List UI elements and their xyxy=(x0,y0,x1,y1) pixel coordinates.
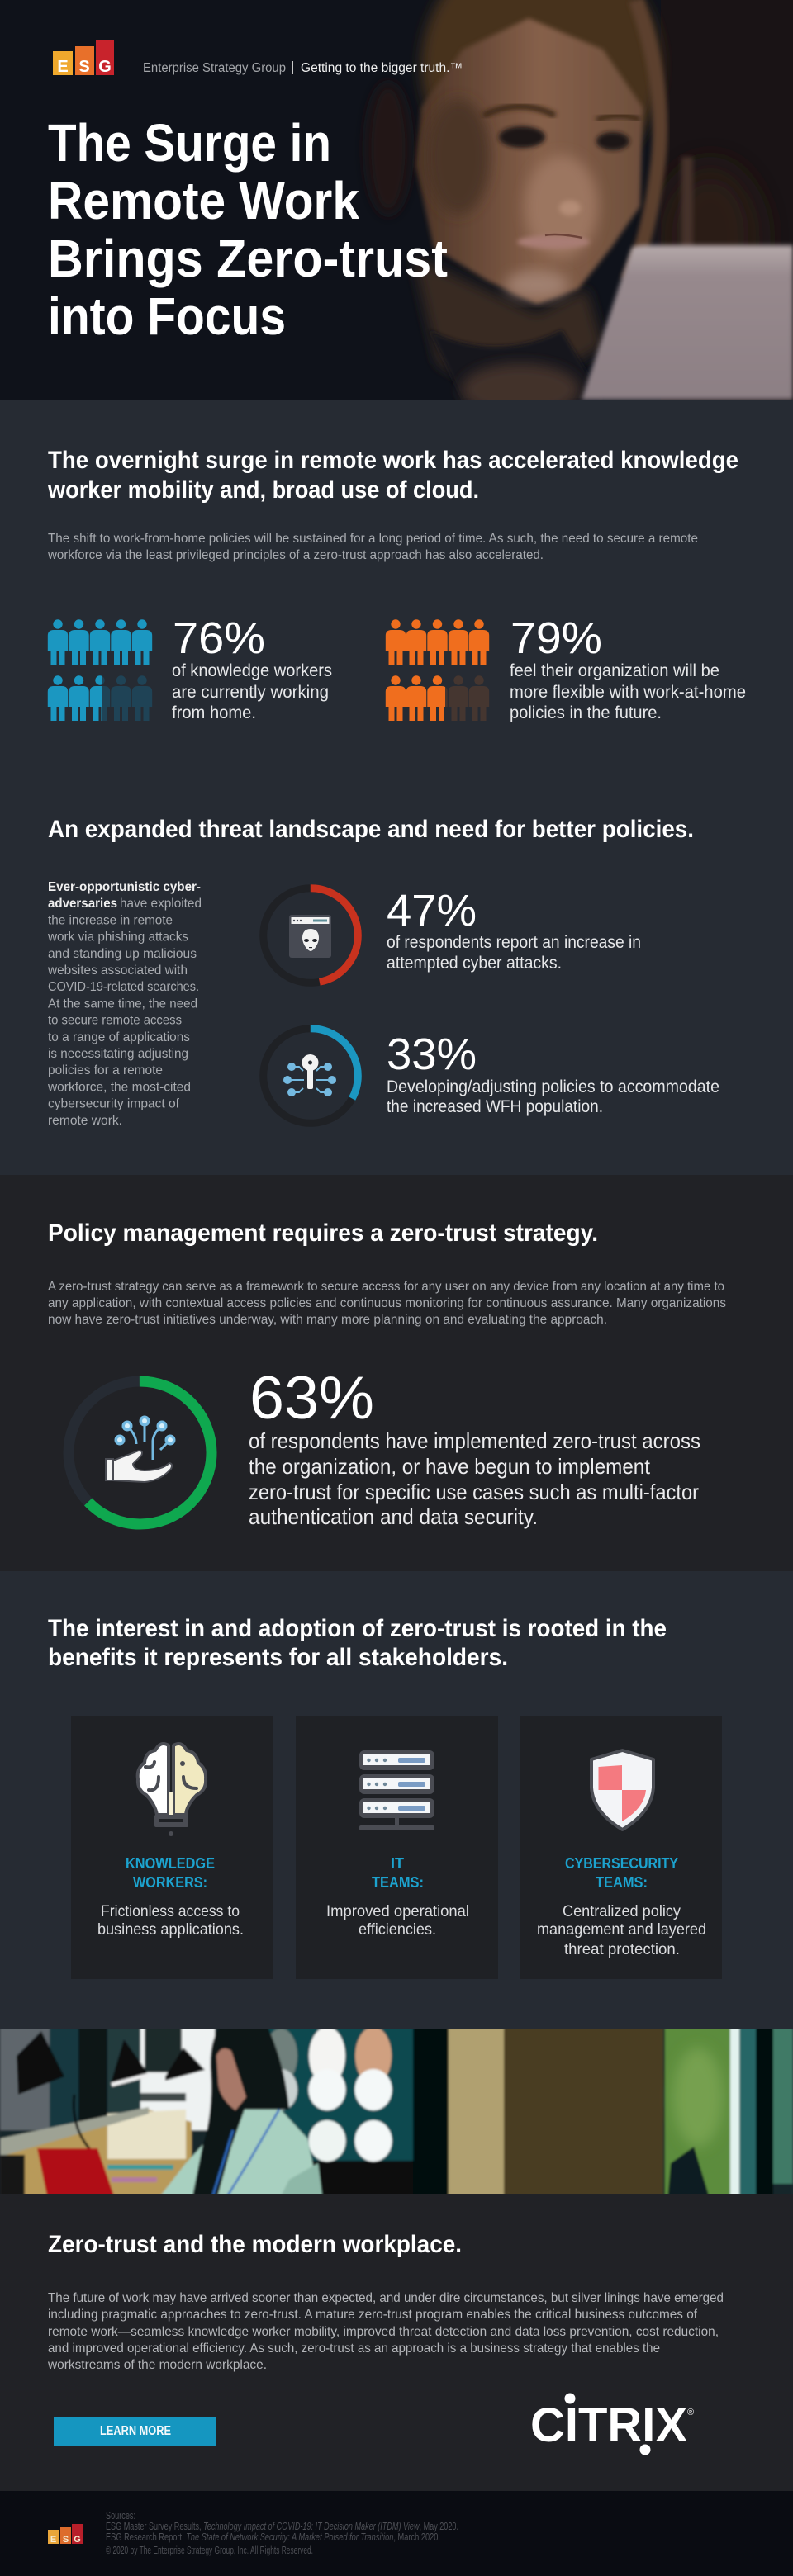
heading: overnight surge: worker mobility and, broad use of cloud. xyxy=(47,476,479,504)
card label: TEAMS: xyxy=(596,1874,648,1891)
panel: cybersecurity teams xyxy=(520,1716,722,1979)
threat text column: work via phishing attacks xyxy=(47,930,188,945)
card text xyxy=(326,1903,469,1939)
threat text column: to secure remote access xyxy=(48,1014,182,1027)
intro text xyxy=(47,532,698,562)
threat text column: At the same time, the need xyxy=(48,997,197,1011)
threat text column: cybersecurity impact of xyxy=(48,1096,180,1111)
threat text column: have exploited xyxy=(120,897,202,911)
card text xyxy=(537,1903,706,1958)
card text: management and layered xyxy=(537,1921,706,1939)
closing text: The future of work may have arrived sooner than expected, and under dire circumstances, but silver linings have emerged xyxy=(48,2291,724,2305)
ESG logo: S xyxy=(78,58,90,76)
stat: 63% xyxy=(249,1365,700,1529)
ring chart: 47% with alien icon xyxy=(264,888,358,983)
tagline: Getting to the bigger truth.™ xyxy=(301,61,463,75)
footer ESG logo: G xyxy=(74,2535,81,2545)
icon: orange people 79% xyxy=(386,619,489,721)
threat text column: COVID-19-related searches. xyxy=(48,980,199,994)
card label xyxy=(565,1855,678,1891)
stat: 79% xyxy=(510,613,746,722)
card label: KNOWLEDGE xyxy=(126,1855,215,1872)
stat: 76% xyxy=(172,613,332,722)
intro text: The shift to work-from-home policies will be sustained for a long period of time. As such, the need to secure a remote xyxy=(48,532,698,546)
stat: 47%: of respondents report an increase in xyxy=(387,933,641,952)
card text: Centralized policy xyxy=(563,1903,681,1920)
card text: Improved operational xyxy=(326,1903,469,1920)
title xyxy=(48,113,448,346)
logo: Citrix: ® xyxy=(687,2408,694,2417)
heading: overnight surge xyxy=(47,447,738,504)
tagline xyxy=(143,61,463,75)
tagline: Enterprise Strategy Group xyxy=(143,61,286,75)
stat: 76%: are currently working xyxy=(172,683,329,702)
card text: Frictionless access to xyxy=(101,1903,240,1920)
stat: 79%: more flexible with work-at-home xyxy=(510,683,746,702)
stat: 63%: 63% xyxy=(249,1365,374,1432)
button: learn more xyxy=(54,2417,216,2446)
heading: benefits: The interest in and adoption of zero-trust is rooted in the xyxy=(48,1615,667,1642)
card label: IT xyxy=(391,1855,404,1872)
footer sources: Sources: xyxy=(106,2510,135,2522)
threat text column: websites associated with xyxy=(47,964,188,978)
icon: blue people 76% xyxy=(48,619,152,721)
card label xyxy=(372,1855,424,1891)
stat: 76%: 76% xyxy=(173,613,265,663)
card label xyxy=(126,1855,215,1891)
ESG logo: E xyxy=(57,58,69,76)
threat text column: workforce, the most-cited xyxy=(47,1080,191,1095)
icon: key with circuit nodes xyxy=(283,1054,336,1096)
stat: 79%: policies in the future. xyxy=(510,703,662,722)
title: The Surge in xyxy=(48,113,331,173)
icon: hand with circuit nodes xyxy=(106,1415,175,1482)
stat: 33%: Developing/adjusting policies to accommodate xyxy=(387,1077,719,1096)
footer ESG logo: S xyxy=(63,2535,69,2545)
icon: browser window with alien xyxy=(289,915,331,958)
footer ESG logo xyxy=(48,2524,83,2545)
threat text column: Ever-opportunistic cyber- xyxy=(48,880,201,894)
footer sources: ESG Master Survey Results, Technology Impact of COVID-19: IT Decision Maker (ITDM) View, May 2020. xyxy=(106,2521,458,2532)
threat text column: to a range of applications xyxy=(48,1030,190,1044)
footer sources: ESG Research Report, The State of Network Security: A Market Poised for Transition, March 2020. xyxy=(106,2531,440,2543)
icon: server rack xyxy=(359,1750,434,1830)
stat: 63%: the organization, or have begun to implement xyxy=(249,1454,651,1479)
threat text column: is necessitating adjusting xyxy=(48,1047,188,1061)
policy text: any application, with contextual access policies and continuous monitoring for continuous assurance. Many organizations xyxy=(48,1296,726,1310)
heading: benefits xyxy=(48,1615,667,1671)
heading: benefits: benefits it represents for all stakeholders. xyxy=(48,1644,508,1671)
stat: 47%: attempted cyber attacks. xyxy=(387,954,562,973)
photo: woman at office desk with red laptop xyxy=(0,2023,793,2200)
footer sources xyxy=(106,2510,458,2556)
closing text: workstreams of the modern workplace. xyxy=(47,2358,267,2372)
closing text xyxy=(47,2291,724,2372)
stat: 63%: authentication and data security. xyxy=(249,1504,538,1529)
policy text xyxy=(48,1280,726,1327)
policy text: now have zero-trust initiatives underway, with many more planning on and evaluating the approach. xyxy=(48,1313,607,1327)
threat text column: the increase in remote xyxy=(48,913,173,928)
stat: 79%: feel their organization will be xyxy=(510,661,719,680)
button: learn more: LEARN MORE xyxy=(100,2424,171,2438)
stat: 47%: 47% xyxy=(387,886,477,935)
policy text: A zero-trust strategy can serve as a framework to secure access for any user on any device from any location at any time to xyxy=(48,1280,724,1294)
heading: overnight surge: The overnight surge in remote work has accelerated knowledge xyxy=(48,447,738,474)
heading: threat landscape: An expanded threat landscape and need for better policies. xyxy=(48,816,694,843)
card label: TEAMS: xyxy=(372,1874,424,1891)
threat text column: and standing up malicious xyxy=(48,947,197,961)
intro text: workforce via the least privileged principles of a zero-trust approach has also accelerated. xyxy=(47,548,544,562)
panel: IT teams xyxy=(296,1716,498,1979)
stat: 76%: of knowledge workers xyxy=(172,661,332,680)
stat: 47% xyxy=(387,886,641,973)
card text: threat protection. xyxy=(564,1941,680,1958)
ring chart: 63% with hand icon xyxy=(69,1381,211,1524)
stat: 76%: from home. xyxy=(172,703,256,722)
footer sources: © 2020 by The Enterprise Strategy Group, Inc. All Rights Reserved. xyxy=(106,2545,313,2556)
card label: CYBERSECURITY xyxy=(565,1855,678,1872)
stat: 79%: 79% xyxy=(510,613,602,663)
heading: modern workplace: Zero-trust and the modern workplace. xyxy=(48,2231,462,2258)
closing text: including pragmatic approaches to zero-trust. A mature zero-trust program enables the critical business outcomes of xyxy=(48,2308,698,2322)
card text: efficiencies. xyxy=(359,1921,436,1939)
threat text column xyxy=(47,880,202,1128)
panel: knowledge workers xyxy=(71,1716,273,1979)
ring chart: 33% with key icon xyxy=(264,1029,358,1123)
closing text: and improved operational efficiency. As such, zero-trust as an approach is a business strategy that enables the xyxy=(48,2342,660,2356)
stat: 33%: 33% xyxy=(387,1030,477,1079)
card text xyxy=(97,1903,244,1939)
title: Remote Work xyxy=(48,171,359,230)
icon: brain light bulb xyxy=(138,1744,206,1836)
title: into Focus xyxy=(48,286,286,346)
closing text: remote work—seamless knowledge worker mobility, improved threat detection and data loss prevention, cost reduction, xyxy=(48,2325,719,2339)
ESG logo: G xyxy=(98,58,112,76)
logo: Citrix: CITRIX xyxy=(530,2398,687,2452)
footer ESG logo: E xyxy=(50,2535,56,2545)
card label: WORKERS: xyxy=(133,1874,207,1891)
threat text column: adversaries xyxy=(48,897,117,911)
stat: 33% xyxy=(387,1030,719,1116)
title: Brings Zero-trust xyxy=(48,229,448,288)
ESG logo xyxy=(53,40,114,76)
icon: shield xyxy=(591,1750,653,1830)
stat: 63%: of respondents have implemented zero-trust across xyxy=(249,1428,700,1453)
threat text column: policies for a remote xyxy=(48,1063,163,1077)
hero photo: woman looking at tablet xyxy=(0,0,793,416)
stat: 33%: the increased WFH population. xyxy=(387,1097,603,1116)
stat: 63%: zero-trust for specific use cases such as multi-factor xyxy=(249,1480,699,1504)
threat text column: remote work. xyxy=(48,1114,122,1128)
heading: policy management: Policy management requires a zero-trust strategy. xyxy=(48,1219,598,1247)
card text: business applications. xyxy=(97,1921,244,1939)
